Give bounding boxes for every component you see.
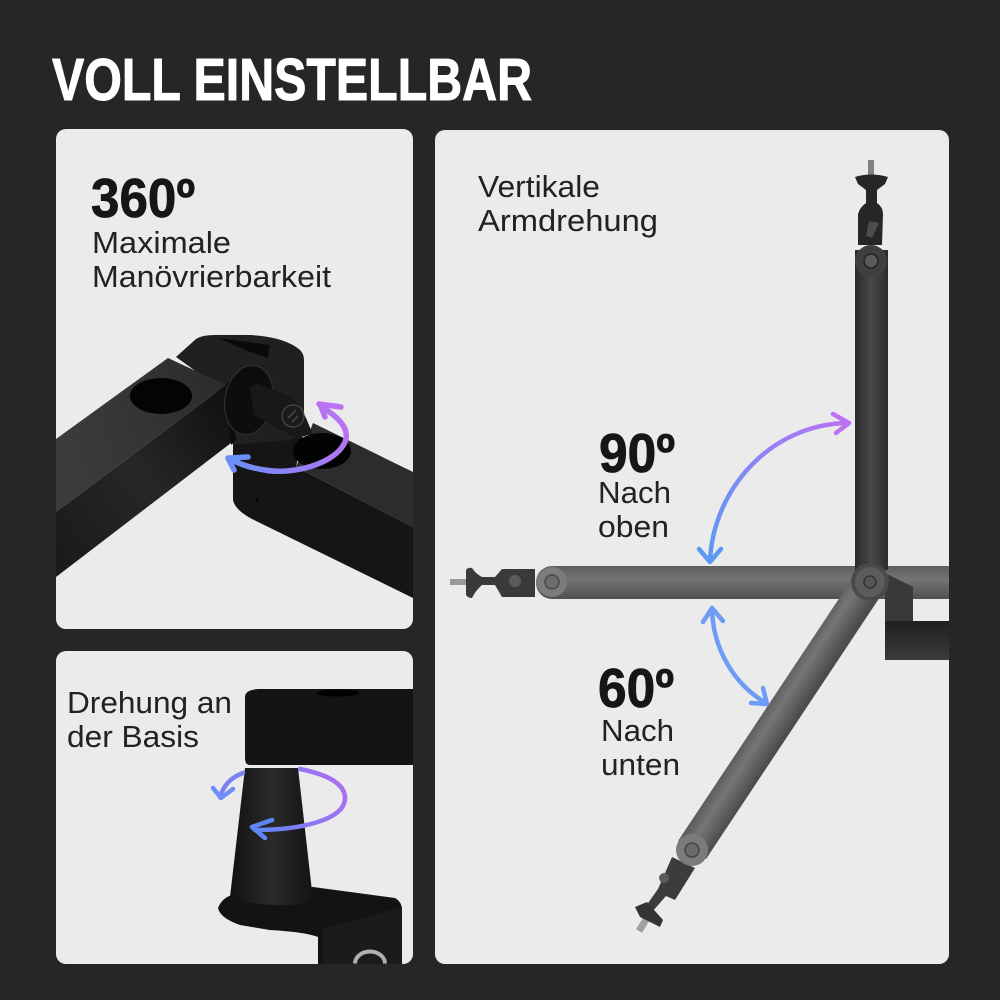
illustration: vertical arm xyxy=(855,160,888,570)
text: Nach unten xyxy=(601,713,680,782)
illustration: arm joint xyxy=(56,335,413,598)
text: Drehung an der Basis: der Basis xyxy=(67,719,199,754)
text: Vertikale Armdrehung xyxy=(478,169,658,238)
panel: 360 degree manoeuvrability xyxy=(56,129,413,629)
text: Drehung an der Basis xyxy=(67,685,232,754)
text: Nach oben: oben xyxy=(598,509,669,544)
illustration: horizontal arm xyxy=(450,566,949,599)
illustration: arm base and clamp xyxy=(218,689,413,964)
illustration: clamp block xyxy=(885,621,949,660)
text: Nach unten: unten xyxy=(601,747,680,782)
text: Maximale Manövrierbarkeit xyxy=(92,225,331,294)
arrow: base rotation xyxy=(213,769,345,838)
illustration: central pivot xyxy=(851,563,913,621)
text: Vertikale Armdrehung: Vertikale xyxy=(478,169,600,204)
text: Nach unten: Nach xyxy=(601,713,674,748)
text: Maximale Manövrierbarkeit: Manövrierbarkeit xyxy=(92,259,331,294)
text: Vertikale Armdrehung: Armdrehung xyxy=(478,203,658,238)
text: Nach oben xyxy=(598,475,671,544)
panel: vertical arm rotation xyxy=(435,130,949,964)
arrow: 60 degrees down xyxy=(703,608,767,704)
text: Nach oben: Nach xyxy=(598,475,671,510)
illustration: diagonal arm xyxy=(635,573,884,931)
heading: 60: 60º xyxy=(598,657,674,719)
title: VOLL EINSTELLBAR xyxy=(52,47,532,113)
panel: base rotation xyxy=(56,651,413,964)
arrow: rotation around joint xyxy=(228,404,346,471)
text: Drehung an der Basis: Drehung an xyxy=(67,685,232,720)
text: Maximale Manövrierbarkeit: Maximale xyxy=(92,225,231,260)
heading: 90: 90º xyxy=(599,422,675,484)
heading: 360: 360º xyxy=(91,167,195,229)
arrow: 90 degrees up xyxy=(699,414,849,562)
